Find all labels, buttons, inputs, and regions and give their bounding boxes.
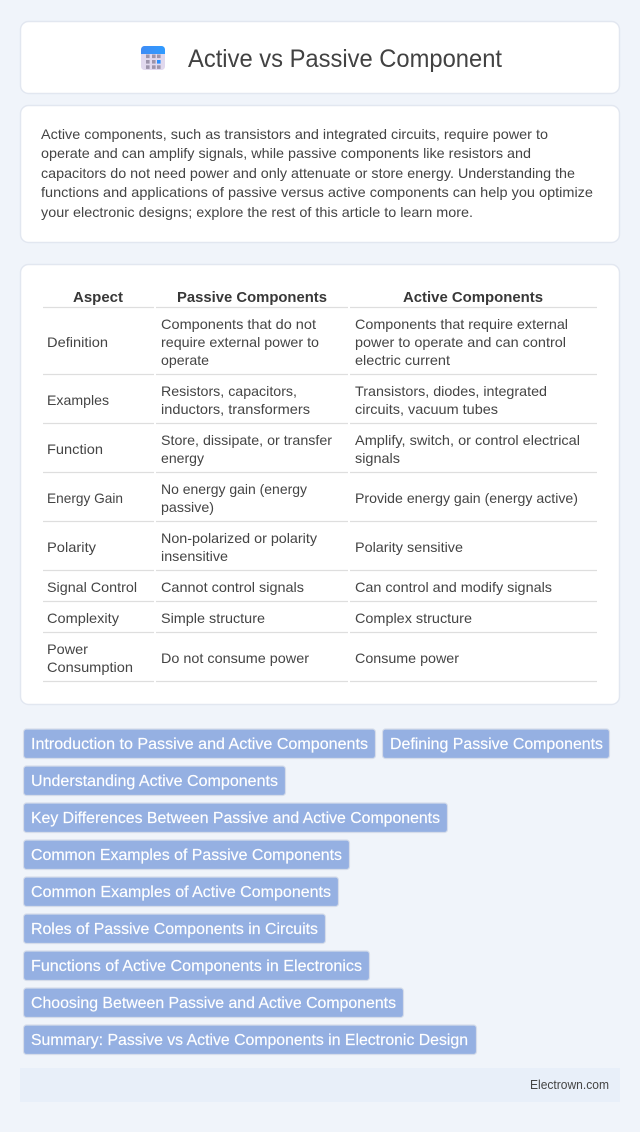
text block: introduction paragraph: capacitors do not need power and only attenuate or store energy. Understanding the [41,165,575,181]
tag: roles passive [24,914,326,944]
icon: calendar [141,46,165,70]
row: examples: Examples [47,392,109,408]
table header row: Passive Components [177,290,327,306]
row: definition: Components that do not [161,316,316,332]
row: signal control: Can control and modify signals [355,579,552,595]
row: energy gain: No energy gain (energy [161,481,307,497]
row: definition [47,316,568,368]
panel: comparison table [20,264,620,704]
row: energy gain: passive) [161,499,214,515]
row: function: energy [161,450,204,466]
table header row: Aspect [73,290,123,306]
tag: roles passive: Roles of Passive Components in Circuits [31,921,318,938]
tag: key differences: Key Differences Between Passive and Active Components [31,810,440,827]
row: complexity: Complexity [47,610,119,626]
row: polarity: insensitive [161,548,228,564]
row: signal control [47,579,552,595]
tag: summary [24,1025,476,1054]
row: definition: Components that require external [355,316,568,332]
row: examples: inductors, transformers [161,401,310,417]
row: examples: circuits, vacuum tubes [355,401,498,417]
row: polarity: Non-polarized or polarity [161,530,317,546]
tag: examples active: Common Examples of Active Components [31,884,331,901]
row: examples: Resistors, capacitors, [161,383,297,399]
row: complexity: Complex structure [355,610,472,626]
table header row [73,290,543,306]
row: definition: operate [161,352,209,368]
row: function [47,432,580,466]
tag: defining passive [382,729,610,758]
row: function: Amplify, switch, or control electrical [355,432,580,448]
tag: introduction [24,729,376,758]
row: polarity: Polarity [47,539,96,555]
row: definition: Definition [47,334,108,350]
tag: choosing: Choosing Between Passive and Active Components [31,995,396,1012]
footer [20,1068,620,1102]
tag: understanding active: Understanding Active Components [31,773,278,790]
row: examples: Transistors, diodes, integrated [355,383,547,399]
table header row: Active Components [403,290,543,306]
tag list: article sections [24,729,610,1054]
text block: introduction paragraph: functions and applications of passive versus active components can help you optimize [41,184,593,200]
tag: understanding active [24,766,286,796]
panel: introduction [20,106,620,242]
tag: key differences [24,803,448,832]
tag: choosing [24,988,404,1018]
row: definition: power to operate and can control [355,334,566,350]
tag: functions active: Functions of Active Components in Electronics [31,958,362,975]
row: function: signals [355,450,400,466]
row: complexity [47,610,472,626]
row: energy gain: Provide energy gain (energy active) [355,490,578,506]
row: power consumption: Power [47,641,88,657]
row: complexity: Simple structure [161,610,265,626]
row: function: Function [47,441,103,457]
text block: introduction paragraph: your electronic designs; explore the rest of this article to learn more. [41,204,473,220]
tag: introduction: Introduction to Passive and Active Components [31,736,368,753]
row: power consumption: Do not consume power [161,650,309,666]
text block: introduction paragraph [41,126,593,220]
row: energy gain: Energy Gain [47,490,123,506]
row: signal control: Signal Control [47,579,137,595]
row: function: Store, dissipate, or transfer [161,432,332,448]
row: signal control: Cannot control signals [161,579,304,595]
row: energy gain [47,481,578,515]
row: polarity [47,530,463,564]
row: power consumption [47,641,459,675]
row: definition: electric current [355,352,450,368]
tag: examples passive: Common Examples of Passive Components [31,847,342,864]
tag: summary: Summary: Passive vs Active Components in Electronic Design [31,1032,468,1049]
text block: introduction paragraph: operate and can amplify signals, while passive components like resistors and [41,145,531,161]
footer: Electrown.com [530,1078,609,1092]
tag: examples passive [24,840,350,870]
title: Active vs Passive Component [188,45,502,73]
row: examples [47,383,547,417]
tag: examples active [24,877,338,906]
row: definition: require external power to [161,334,319,350]
text block: introduction paragraph: Active components, such as transistors and integrated circuits, require power to [41,126,548,142]
panel: header [20,22,620,94]
row: polarity: Polarity sensitive [355,539,463,555]
tag: functions active [24,951,370,980]
row: power consumption: Consumption [47,659,133,675]
row: power consumption: Consume power [355,650,459,666]
tag: defining passive: Defining Passive Components [390,736,603,753]
